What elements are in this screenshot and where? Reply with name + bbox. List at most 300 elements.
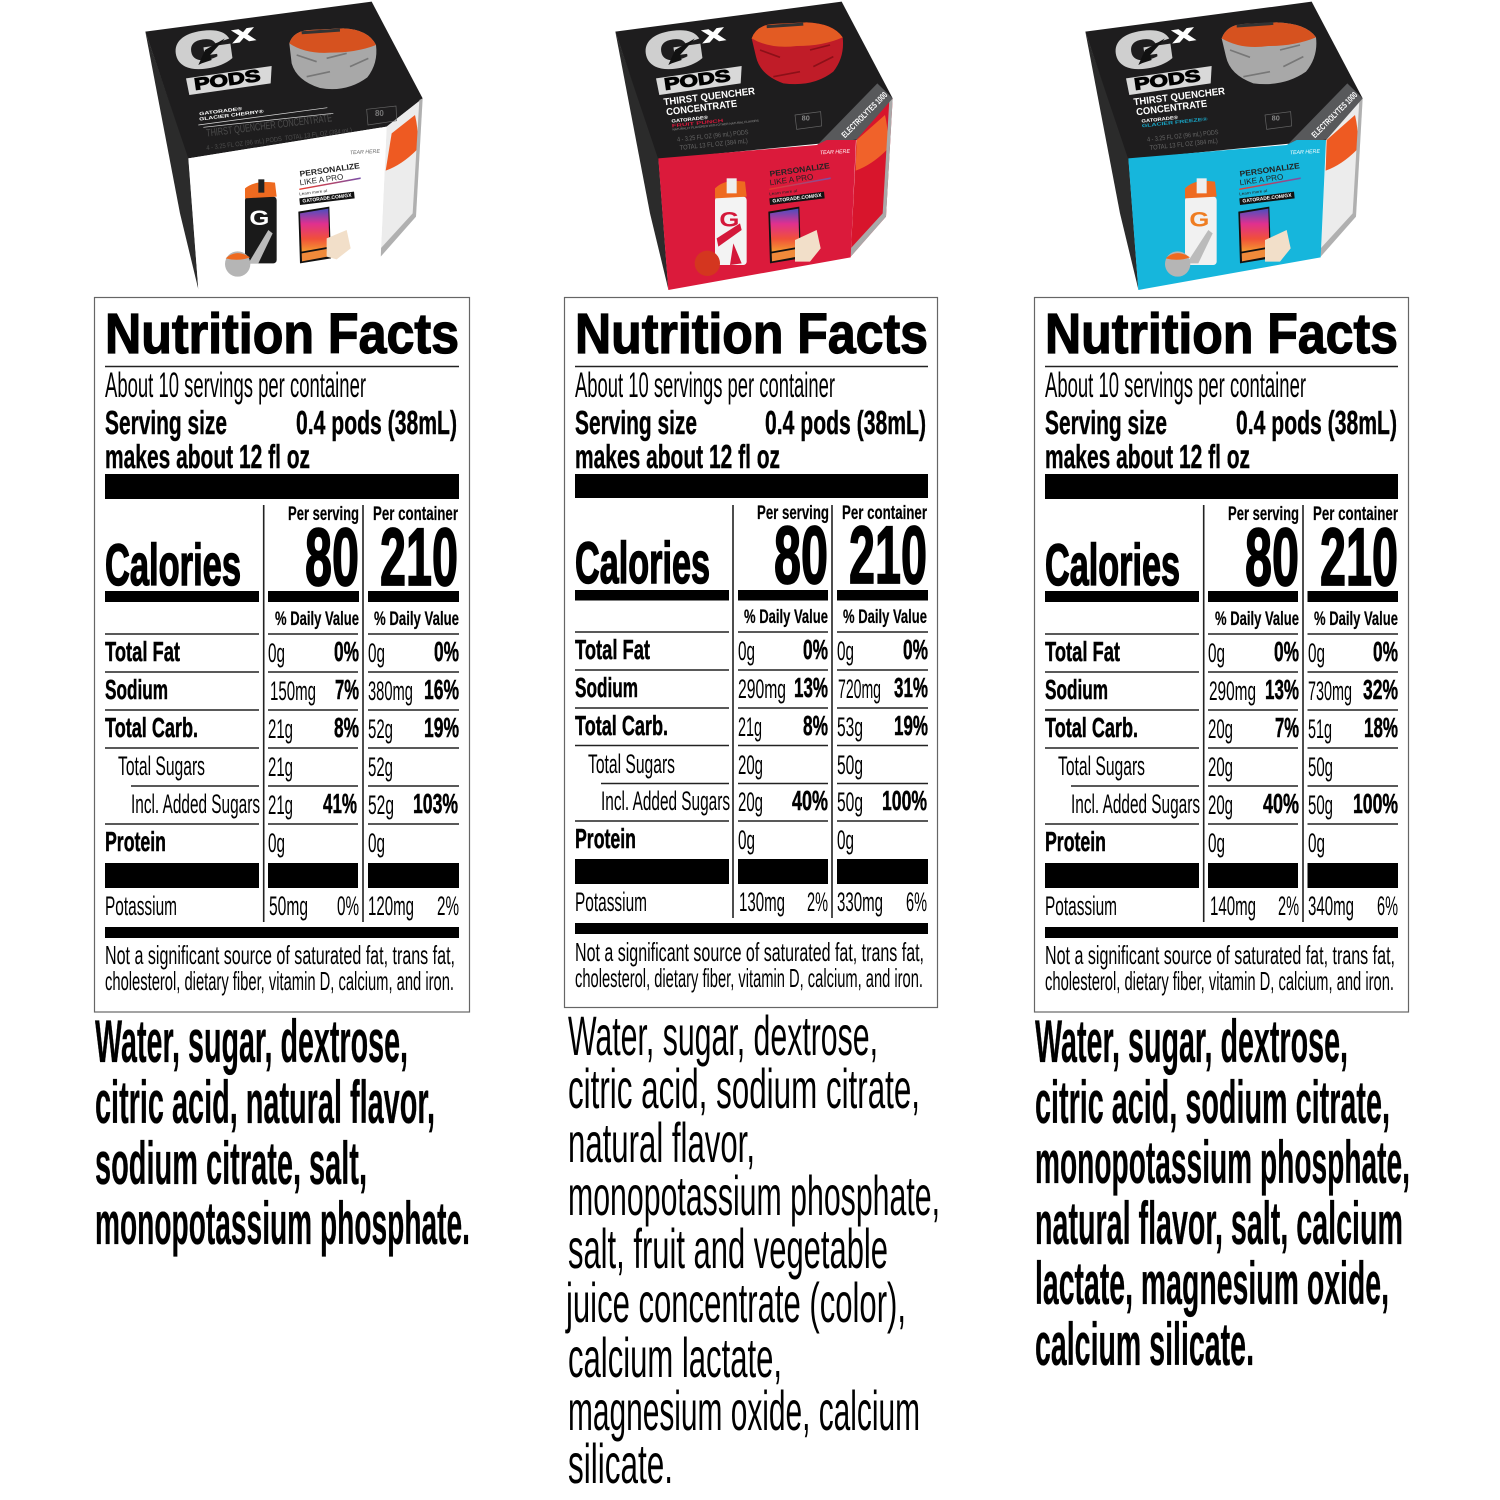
calories badge [795,112,822,129]
calories row [575,510,927,601]
row: protein: 0g [837,825,854,855]
row: total carb: 21g [268,714,293,744]
calories badge: 80 [802,114,810,123]
product description [1133,86,1226,118]
logo: G: G [1111,19,1177,82]
headline: PERSONALIZE [1239,161,1301,179]
thick bars [575,590,928,600]
row: total fat: 0g [368,638,385,668]
black bars [575,859,928,884]
row: sodium: 720mg [838,674,881,704]
product description [198,108,352,152]
daily value headers: % Daily Value [1215,608,1299,630]
net contents: TOTAL 13 FL OZ (384 mL) [1149,138,1218,152]
row: added sugars: 41% [323,788,357,819]
row: sodium: 380mg [368,676,413,706]
row: added sugars [1071,788,1398,820]
logo: X: X [1172,24,1196,47]
column headers [288,503,458,525]
box right window with pod [381,98,423,257]
row: total fat: 0g [1308,638,1325,668]
url label [1239,188,1295,205]
bottle [1185,178,1217,265]
row: total carb: 51g [1308,714,1332,744]
logo: G: G [171,19,237,82]
row: added sugars: 100% [1353,788,1398,819]
headline [769,161,831,190]
pod image [1222,22,1316,84]
product description [663,86,756,118]
row: potassium: 140mg [1210,891,1256,921]
row: added sugars: 50g [837,787,863,817]
row: added sugars: 100% [882,785,927,816]
badge: PODS [186,66,272,95]
row: added sugars [131,788,458,820]
daily value headers [1215,608,1398,630]
electrolytes ribbon: ELECTROLYTES 1000 [839,90,889,140]
flavour name: GLACIER FREEZE® [1141,115,1209,128]
sweat patch [795,230,821,262]
title: Nutrition Facts [1045,302,1398,366]
row: added sugars: 40% [792,785,828,816]
serving size: Serving size [575,404,697,441]
row: protein: 0g [268,828,285,858]
row: total sugars [1058,751,1333,782]
row: sodium: 290mg [1209,676,1256,706]
row: sodium: 13% [1265,674,1299,705]
row: total sugars: 52g [368,752,393,782]
row: total carb: 19% [894,710,928,741]
product description: THIRST QUENCHER CONCENTRATE [206,112,333,140]
row: potassium: 130mg [739,887,785,917]
panel: nutrition facts, Glacier Cherry [94,298,470,1012]
ingredients: Glacier Cherry [95,1008,470,1257]
thick bars [1045,591,1398,602]
footnote [575,937,924,993]
footnote: Not a significant source of saturated fat, trans fat, [105,940,455,970]
calories row: 80 [305,512,359,603]
row: total sugars: 50g [1308,752,1333,782]
net contents: 4 - 3.25 FL OZ (96 mL) PODS [677,129,749,144]
serving size: Serving size [105,404,227,441]
badge: PODS [656,66,742,95]
calories row: 210 [849,510,927,601]
ingredients: Glacier Cherry: Water, sugar, dextrose, [95,1008,408,1075]
net contents [1147,129,1219,152]
row: total carb: 18% [1364,712,1398,743]
daily value headers: % Daily Value [374,608,459,630]
row: potassium: 0% [337,891,359,921]
row: sodium: Sodium [105,674,168,705]
row: sodium: Sodium [1045,674,1108,705]
row: total fat: Total Fat [1045,636,1120,667]
row: protein [575,823,854,855]
row: potassium: 6% [906,887,927,917]
flavour name [671,114,759,132]
calories badge [367,106,397,125]
product box: Glacier Freeze [1085,2,1363,290]
daily value headers: % Daily Value [843,606,927,628]
row: total sugars: 50g [837,750,863,780]
row: total carb: 8% [803,710,828,741]
column headers: Per serving [288,503,359,525]
row: total carb [575,710,928,742]
ingredients: Fruit Punch [565,1004,940,1495]
serving size [575,404,926,475]
tear here: TEAR HERE [350,149,380,156]
row: potassium [575,887,927,917]
calories row: 80 [774,510,828,601]
row: potassium: 120mg [368,891,414,921]
calories row: 80 [1245,512,1299,603]
footnote [105,940,455,996]
box right window with pod [1321,98,1363,257]
row: total carb: 53g [837,712,863,742]
column headers: Per serving [757,502,829,524]
row: added sugars: 20g [1208,790,1233,820]
row: total carb: 52g [368,714,393,744]
column headers: Per container [842,502,927,524]
row: potassium [105,891,459,921]
row: total sugars: Total Sugars [118,751,205,781]
ingredients: Fruit Punch: citric acid, sodium citrate, [568,1057,920,1120]
row: protein: 0g [1208,828,1225,858]
row: total fat: 0% [903,634,928,665]
calories badge: 80 [1272,114,1280,123]
calories row: 210 [1320,512,1398,603]
daily value headers: % Daily Value [275,608,359,630]
product description: CONCENTRATE [666,99,738,118]
front sleeve [188,127,387,289]
tear here: TEAR HERE [1290,149,1320,156]
calories row [1045,512,1398,603]
url label: Learn more at [1239,188,1269,196]
infographic canvas: monopotassium phosphate. [95,1190,470,1257]
column headers [1228,503,1398,525]
column headers: Per container [373,503,458,525]
logo: G [641,19,707,82]
ingredients: Glacier Cherry: citric acid, natural flavor, [95,1069,435,1136]
ingredients: Fruit Punch: Water, sugar, dextrose, [568,1004,878,1067]
serving size [1045,404,1397,475]
row: added sugars: Incl. Added Sugars [131,789,260,819]
badge: PODS: PODS [193,66,262,94]
row: protein [1045,826,1325,858]
box top face [1085,2,1363,159]
small pod [695,251,720,276]
row: potassium: Potassium [1045,891,1117,921]
row: potassium [1045,891,1398,921]
footnote: cholesterol, dietary fiber, vitamin D, calcium, and iron. [575,963,923,993]
box left side [145,32,198,289]
daily value headers [275,608,459,630]
row: added sugars: 50g [1308,790,1333,820]
phone [298,207,331,263]
box left side [1085,32,1138,289]
row: added sugars: 21g [268,790,293,820]
row: total carb: 7% [1275,712,1299,743]
badge: PODS: PODS [1133,66,1202,94]
electrolytes ribbon [1287,83,1363,146]
black bar [1045,474,1398,499]
black bar [575,474,928,498]
bottle: G [719,207,739,232]
small pod [1165,251,1190,277]
logo: X: X [232,24,256,47]
row: potassium: Potassium [575,887,647,917]
row: total fat: 0% [1373,636,1398,667]
servings per container: About 10 servings per container [575,366,835,405]
flavour name: NATURALLY FLAVORED WITH OTHER NATURAL FLAVORS [672,119,759,132]
serving size: Serving size [1045,404,1167,441]
row: added sugars: 20g [738,787,763,817]
servings per container: About 10 servings per container [105,366,366,405]
footnote: Not a significant source of saturated fat, trans fat, [575,937,924,967]
row: sodium [1045,674,1398,706]
logo: G [171,19,237,82]
row: total fat: Total Fat [105,636,180,667]
bottle: G [249,205,269,230]
net contents: TOTAL 13 FL OZ (384 mL) [679,138,748,152]
front sleeve [1128,140,1326,290]
row: total fat: 0g [738,636,755,666]
serving size: 0.4 pods (38mL) [765,404,926,441]
column headers [757,502,927,524]
row: sodium [105,674,459,706]
daily value headers: % Daily Value [1314,608,1398,630]
row: total sugars [588,749,863,780]
row: sodium: 290mg [738,674,786,704]
net contents [677,129,749,152]
url label: GATORADE.COM/GX [302,193,353,205]
url label: Learn more at [769,188,799,196]
row: added sugars: Incl. Added Sugars [1071,789,1200,819]
box right window with pod [851,98,893,257]
thick bar [105,927,459,938]
title: Nutrition Facts [575,302,928,366]
panel: nutrition facts, Glacier Freeze [1034,298,1408,1012]
tear here: TEAR HERE [820,149,850,156]
flavour name: GATORADE® [671,114,709,124]
calories row: Calories [105,533,241,598]
calories badge: 80 [375,109,384,118]
row: added sugars: 40% [1263,788,1299,819]
title: Nutrition Facts [105,302,459,366]
url label [769,188,825,205]
row: total fat: Total Fat [575,634,650,665]
flavour name [199,105,265,122]
calories row: Calories [1045,533,1180,598]
logo: G [1111,19,1177,82]
row: sodium: Sodium [575,672,638,703]
row: sodium: 32% [1363,674,1398,705]
row: total carb: Total Carb. [575,710,668,741]
url label [299,188,355,205]
black bars [1045,863,1398,888]
badge: PODS: PODS [663,66,732,94]
product description: THIRST QUENCHER [1133,86,1226,108]
row: total carb: 21g [738,712,762,742]
front sleeve [658,140,856,290]
row: total carb: Total Carb. [1045,712,1138,743]
sweat patch [327,230,351,259]
row: total fat: 0% [1274,636,1299,667]
headline [1239,161,1301,190]
row: protein: 0g [1308,828,1325,858]
calories row: Calories [575,531,710,596]
logo: X: X [702,24,726,47]
ingredients: Fruit Punch: juice concentrate (color), [565,1271,906,1334]
ingredients: Glacier Freeze: calcium silicate. [1035,1311,1254,1378]
row: total carb: 19% [424,712,459,743]
black bar [105,474,459,499]
serving size: makes about 12 fl oz [1045,438,1250,475]
row: added sugars: 103% [413,788,458,819]
logo: G: G [641,19,707,82]
serving size: 0.4 pods (38mL) [296,404,457,441]
column headers: Per container [1313,503,1398,525]
row: total sugars: Total Sugars [1058,751,1145,781]
row: sodium: 7% [335,674,359,705]
row: protein: Protein [1045,826,1106,857]
ingredients: Fruit Punch: silicate. [568,1432,673,1495]
row: protein: 0g [738,825,755,855]
headline: PERSONALIZE [299,161,361,179]
flavour name: GLACIER CHERRY® [199,108,265,122]
ingredients: Fruit Punch: salt, fruit and vegetable [568,1217,888,1280]
pod image [289,28,376,89]
row: total fat: 0g [1208,638,1225,668]
row: total fat: 0g [837,636,854,666]
row: total fat: 0% [803,634,828,665]
headline: LIKE A PRO [769,172,814,187]
row: added sugars [601,785,927,817]
row: protein: 0g [368,828,385,858]
row: total carb [105,712,459,744]
footnote [1045,940,1395,996]
row: total sugars [118,751,393,782]
row: potassium: Potassium [105,891,177,921]
box top face [615,2,893,159]
phone [1238,207,1271,263]
daily value headers [744,606,927,628]
row: potassium: 330mg [837,887,883,917]
row: potassium: 2% [807,887,828,917]
calories row: 210 [380,512,458,603]
row: total carb: 20g [1208,714,1233,744]
row: total sugars: 20g [1208,752,1233,782]
row: sodium: 16% [424,674,459,705]
row: protein: Protein [575,823,636,854]
serving size: makes about 12 fl oz [105,438,310,475]
headline: LIKE A PRO [299,172,344,187]
product box: Glacier Cherry [145,2,423,289]
row: added sugars: 52g [368,790,394,820]
serving size: 0.4 pods (38mL) [1236,404,1397,441]
row: total sugars: 21g [268,752,293,782]
flavour name [1141,114,1209,128]
sweat patch [1265,230,1291,262]
url label: GATORADE.COM/GX [1242,193,1293,205]
flavour name: GATORADE® [1141,114,1179,124]
row: total fat [1045,636,1398,668]
product description: THIRST QUENCHER [663,86,756,108]
row: sodium: 730mg [1308,676,1352,706]
row: potassium: 340mg [1308,891,1354,921]
row: total fat [105,636,459,668]
url label: Learn more at [299,188,329,196]
phone [768,207,801,263]
row: sodium [575,672,928,704]
row: potassium: 2% [437,891,459,921]
pod image [752,22,843,84]
ingredients: Glacier Freeze [1035,1008,1410,1378]
row: total carb: Total Carb. [105,712,198,743]
row: total fat [575,634,928,666]
row: protein: Protein [105,826,166,857]
ingredients: Fruit Punch: natural flavor, [568,1111,755,1174]
panel: nutrition facts, Fruit Punch [564,298,938,1008]
product description: CONCENTRATE [1136,99,1208,118]
row: potassium: 50mg [269,891,308,921]
flavour name: FRUIT PUNCH [672,118,725,128]
row: protein [105,826,385,858]
row: potassium: 2% [1278,891,1299,921]
url label: GATORADE.COM/GX [772,193,823,205]
badge: PODS [1126,66,1212,95]
thick bar [575,923,928,934]
bottle [245,179,277,263]
box left side [615,32,668,289]
ingredients: Fruit Punch: magnesium oxide, calcium [568,1379,920,1442]
bottle: G [1189,207,1209,232]
daily value headers: % Daily Value [744,606,828,628]
row: potassium: 6% [1377,891,1398,921]
row: sodium: 150mg [270,676,316,706]
row: added sugars: Incl. Added Sugars [601,786,730,816]
ingredients: Glacier Cherry: sodium citrate, salt, [95,1130,367,1197]
headline: LIKE A PRO [1239,172,1284,187]
row: total fat: 0% [434,636,459,667]
box top face [145,2,423,158]
serving size [105,404,457,475]
column headers: Per serving [1228,503,1299,525]
row: total fat: 0g [268,638,285,668]
ingredients: Fruit Punch: calcium lactate, [568,1326,782,1389]
row: total sugars: 20g [738,750,763,780]
product box: Fruit Punch [615,2,893,290]
small pod [225,251,250,277]
calories row [105,512,458,603]
flavour name: GATORADE® [199,105,243,116]
row: total carb [1045,712,1398,744]
black bars [105,863,459,888]
row: sodium: 31% [894,672,928,703]
headline [299,161,361,190]
thick bar [1045,927,1398,938]
row: total sugars: Total Sugars [588,749,675,779]
product description: 4 - 3.25 FL OZ (96 mL) PODS TOTAL 13 FL OZ (384 mL) [206,127,352,152]
calories badge [1265,112,1292,129]
thick bars [105,591,459,602]
ingredients: Fruit Punch: monopotassium phosphate, [568,1164,940,1227]
bottle [715,178,747,265]
row: total carb: 8% [334,712,359,743]
row: sodium: 13% [794,672,828,703]
electrolytes ribbon [817,83,893,146]
electrolytes ribbon: ELECTROLYTES 1000 [1309,90,1359,140]
serving size: makes about 12 fl oz [575,438,780,475]
